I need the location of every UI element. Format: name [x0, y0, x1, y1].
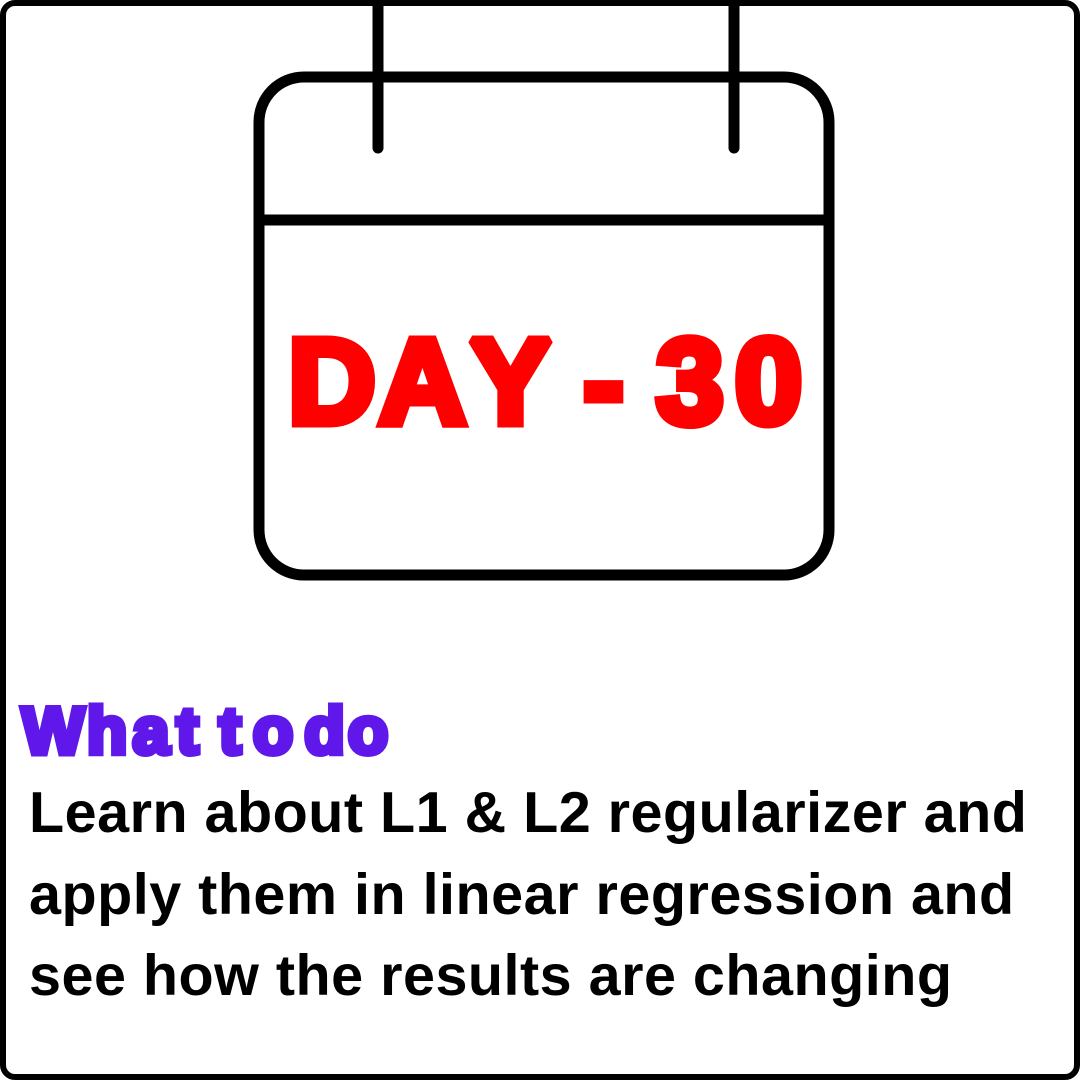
text block: description: see how the results are changing: [29, 944, 952, 1008]
calendar label: DAY - 30: DAY - 30: [288, 313, 802, 449]
icon: calendar: [254, 6, 834, 580]
text block: description: apply them in linear regression and: [29, 863, 1015, 927]
text block: description: [29, 781, 1027, 1008]
text block: description: Learn about L1 & L2 regularizer and: [29, 781, 1027, 845]
heading: What to do: What to do: [22, 694, 388, 768]
